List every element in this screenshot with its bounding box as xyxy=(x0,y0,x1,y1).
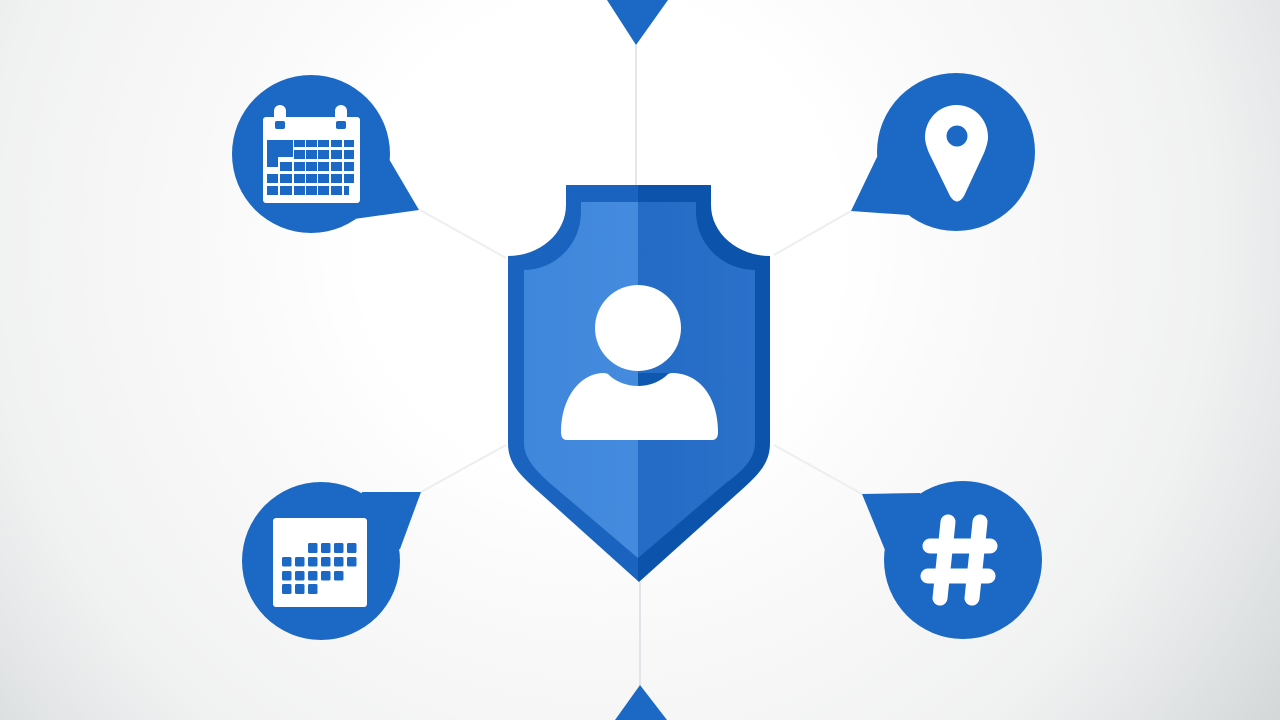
location bubble xyxy=(851,73,1035,231)
icon: date grid xyxy=(273,518,367,607)
icon: person xyxy=(561,270,718,440)
icon: map pin xyxy=(925,105,988,202)
icon: calendar xyxy=(263,105,360,203)
bubble: number xyxy=(862,481,1042,639)
bubble: calendar xyxy=(232,75,419,233)
bottom arrow marker xyxy=(615,685,667,720)
central shield xyxy=(508,185,770,582)
bubble: schedule xyxy=(242,482,421,640)
top arrow marker xyxy=(607,0,668,45)
shield border xyxy=(508,185,770,582)
calendar bubble xyxy=(232,75,419,233)
bubble: location xyxy=(851,73,1035,231)
schedule bubble xyxy=(242,482,421,640)
connector lines xyxy=(420,45,862,686)
shield face xyxy=(524,202,755,558)
number bubble xyxy=(862,481,1042,639)
icon: hash xyxy=(928,522,990,598)
